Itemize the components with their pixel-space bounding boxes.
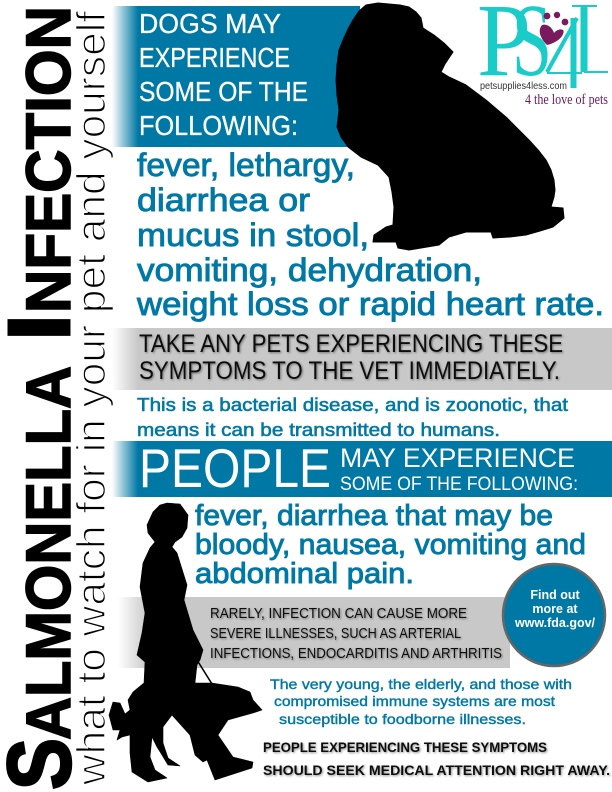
panel: dogs heading xyxy=(112,6,360,147)
people symptoms list: abdominal pain. xyxy=(195,558,414,590)
dogs heading text: FOLLOWING: xyxy=(139,110,298,141)
dog symptoms list: fever, lethargy, xyxy=(137,147,355,183)
panel: rare complications xyxy=(118,597,510,668)
people symptoms list: bloody, nausea, vomiting and xyxy=(195,529,586,561)
rare complications text: INFECTIONS, ENDOCARDITIS AND ARTHRITIS xyxy=(210,645,502,662)
icon: dog silhouette xyxy=(336,3,564,250)
logo url: petsupplies4less.com xyxy=(480,80,567,92)
susceptibility note xyxy=(270,676,572,727)
susceptibility note: The very young, the elderly, and those with xyxy=(270,676,572,692)
people heading text: MAY EXPERIENCE xyxy=(340,443,575,473)
icon: person and guide dog silhouette xyxy=(109,503,262,782)
title xyxy=(0,6,90,790)
zoonotic note: This is a bacterial disease, and is zoonotic, that xyxy=(137,395,568,415)
callout: fda link: Find out xyxy=(530,588,580,602)
icon: paw heart xyxy=(540,12,568,45)
vet warning text: SYMPTOMS TO THE VET IMMEDIATELY. xyxy=(139,357,560,385)
dog symptoms list xyxy=(136,147,604,322)
susceptibility note: susceptible to foodborne illnesses. xyxy=(279,711,526,727)
people word: PEOPLE xyxy=(139,437,331,499)
zoonotic note xyxy=(137,395,568,440)
medical attention note xyxy=(263,739,610,778)
people symptoms list xyxy=(195,500,586,590)
logo xyxy=(477,0,608,108)
dog symptoms list: mucus in stool, xyxy=(137,217,369,253)
rare complications text: RARELY, INFECTION CAN CAUSE MORE xyxy=(210,605,467,622)
people heading text xyxy=(340,443,578,495)
dogs heading text: DOGS MAY xyxy=(139,8,281,39)
rare complications text: SEVERE ILLNESSES, SUCH AS ARTERIAL xyxy=(210,625,461,642)
medical attention note: SHOULD SEEK MEDICAL ATTENTION RIGHT AWAY. xyxy=(263,762,610,778)
zoonotic note: means it can be transmitted to humans. xyxy=(137,420,500,440)
dogs heading text: EXPERIENCE xyxy=(139,42,290,73)
subtitle: what to watch for in your pet and yourself xyxy=(68,10,114,786)
callout: fda link: more at xyxy=(532,602,578,616)
logo numeral 4 xyxy=(547,18,582,88)
callout: fda link xyxy=(503,564,605,666)
vet warning text xyxy=(139,330,563,385)
rare complications text xyxy=(210,605,502,662)
dogs heading text xyxy=(139,8,308,141)
title: NFECTION xyxy=(14,6,84,313)
logo letter L xyxy=(572,5,608,72)
dog symptoms list: diarrhea or xyxy=(137,182,310,218)
panel: vet warning xyxy=(112,328,612,390)
panel: people heading xyxy=(112,437,612,499)
people heading text: SOME OF THE FOLLOWING: xyxy=(340,473,578,495)
dogs heading text: SOME OF THE xyxy=(139,76,308,107)
vet warning text: TAKE ANY PETS EXPERIENCING THESE xyxy=(139,330,563,358)
dog symptoms list: weight loss or rapid heart rate. xyxy=(136,286,604,322)
people symptoms list: fever, diarrhea that may be xyxy=(195,500,553,532)
susceptibility note: compromised immune systems are most xyxy=(274,693,555,709)
callout: fda link: www.fda.gov/ xyxy=(514,616,596,630)
dog symptoms list: vomiting, dehydration, xyxy=(137,252,482,288)
medical attention note: PEOPLE EXPERIENCING THESE SYMPTOMS xyxy=(263,739,547,755)
title: ALMONELLA xyxy=(14,366,84,740)
